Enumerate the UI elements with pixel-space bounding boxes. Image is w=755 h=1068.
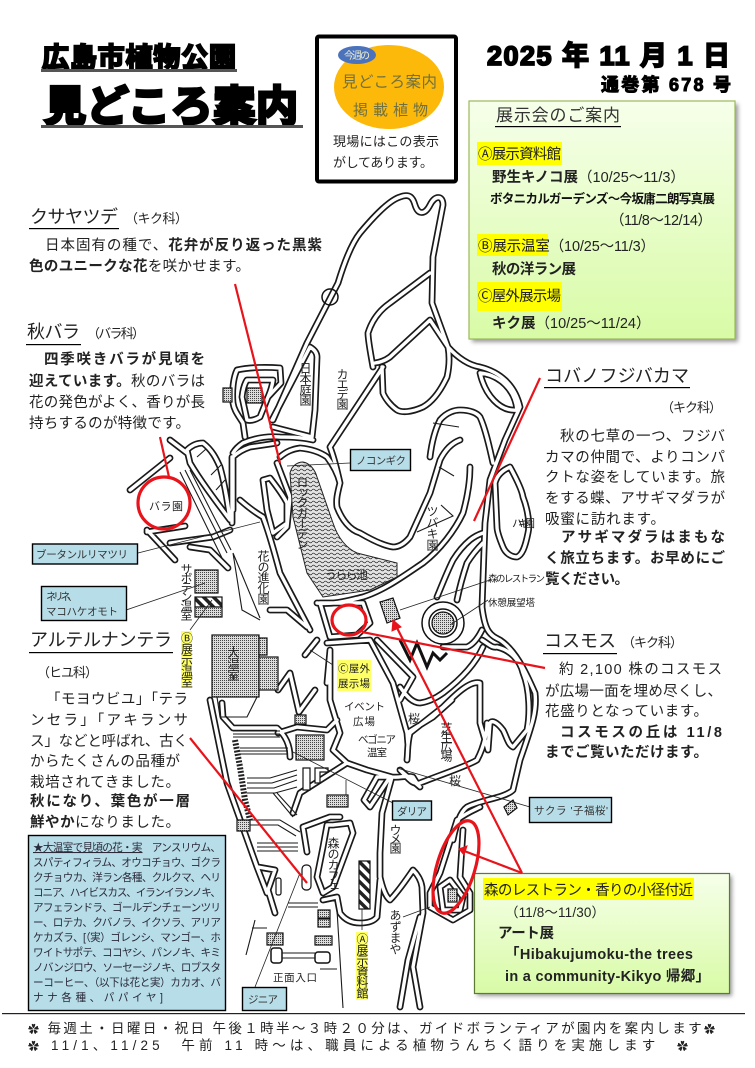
map place names: Ⓑ展示温室: [180, 632, 194, 688]
text block: 秋バラ: [26, 322, 205, 432]
map place names: 日本庭園: [298, 362, 312, 406]
map place names: ベゴニア: [358, 733, 396, 746]
text block: コスモス: コスモス: [544, 631, 616, 651]
text block: アルテルナンテラ: （ヒユ科）: [37, 665, 98, 680]
map buildings: [195, 289, 517, 963]
panel: exhibitions: ボタニカルガーデンズ～今坂庸二朗写真展: [490, 191, 715, 206]
text block: コスモス: [543, 631, 722, 761]
icon: orange sign: 掲載植物: [353, 102, 428, 119]
map place names: 花の進化園: [256, 550, 270, 605]
text block: アルテルナンテラ: アルテルナンテラ: [30, 630, 172, 650]
label: ダリア: ダリア: [397, 805, 427, 818]
text block: アルテルナンテラ: 秋になり、葉色が一層: [30, 792, 190, 810]
text block: コバノフジバカマ: コバノフジバカマ: [545, 366, 689, 386]
text block: クサヤツデ: [29, 207, 322, 275]
text block: クサヤツデ: （キク科）: [125, 211, 188, 226]
panel: greenhouse plant list: [28, 836, 226, 1010]
map place names: うらら池: [325, 568, 368, 582]
panel: greenhouse plant list: アフェランドラ、ゴールデンチェーンツリ: [33, 901, 221, 914]
label: ネリネ、マコハケオモト: [42, 586, 126, 620]
panel: greenhouse plant list: スパティフィラム、オウコチョウ、ゴクラ: [33, 856, 221, 869]
footer rule: [2, 1013, 745, 1014]
map place names: [149, 362, 545, 1000]
text block: コバノフジバカマ: 覧ください。: [545, 571, 629, 588]
observation tower: [422, 602, 464, 644]
map place names: ツバキ園: [425, 505, 439, 551]
text block: コスモス: （キク科）: [622, 635, 683, 650]
label: ジニア: ジニア: [248, 994, 278, 1006]
text block: コスモス: 約 2,100 株のコスモス: [559, 661, 722, 678]
panel: art exhibition: [474, 874, 732, 996]
panel: greenhouse plant list: クチョウカ、洋ラン各種、クルクマ、ヘリ: [33, 871, 221, 884]
text block: コバノフジバカマ: （キク科）: [661, 400, 722, 415]
footer notes: ✿ 11/1、11/25 午前 11 時～は、職員による植物うんちく語りを実施します ✿: [28, 1037, 688, 1053]
text block: 秋バラ: 四季咲きバラが見頃を: [44, 350, 205, 368]
map place names: 桜: [408, 712, 420, 726]
text block: コバノフジバカマ: アサギマダラはまもな: [561, 528, 725, 546]
text block: 秋バラ: 秋バラ: [27, 322, 80, 342]
title: garden name and heading: 見どころ案内: [44, 83, 298, 130]
panel: exhibitions: キク展（10/25～11/24）: [492, 315, 650, 332]
text block: コバノフジバカマ: く旅立ちます。お早めにご: [545, 549, 726, 567]
text block: 秋バラ: 花の発色がよく、香りが長: [29, 394, 205, 411]
text block: クサヤツデ: 色のユニークな花を咲かせます。: [29, 257, 250, 275]
text block: 秋バラ: 迎えています。秋のバラは: [29, 373, 205, 390]
date and issue number: [487, 41, 731, 95]
footer notes: [28, 1021, 715, 1053]
map place names: 芝生広場: [439, 722, 453, 763]
map place names: ウメ園: [388, 824, 402, 854]
text block: クサヤツデ: 日本固有の種で、花弁が反り返った黒紫: [45, 236, 322, 254]
panel: greenhouse plant list: ノバンジロウ、ソーセージノキ、ロブスタ: [33, 961, 221, 974]
text block: アルテルナンテラ: ンセラ」「アキランサ: [30, 712, 188, 729]
map fine lines: [180, 423, 459, 1008]
rock garden pond: [290, 462, 397, 597]
label: サクラ 子福桜: [530, 798, 612, 822]
map place names: 広場: [353, 715, 376, 728]
panel: exhibitions: （11/8～12/14）: [610, 212, 712, 229]
panel heading: 展示会のご案内: [496, 106, 620, 125]
icon: orange sign: 今週の: [344, 49, 370, 62]
text block: アルテルナンテラ: からたくさんの品種が: [30, 753, 180, 770]
text block: コバノフジバカマ: クトな姿をしています。旅: [545, 469, 726, 486]
title: garden name and heading: [41, 43, 303, 130]
label: ノコンギク: ノコンギク: [356, 455, 406, 467]
panel: art exhibition: 森のレストラン・香りの小径付近: [484, 882, 693, 899]
panel: exhibitions: Ⓐ展示資料館: [478, 146, 561, 163]
label: ダリア: [392, 801, 432, 820]
text block: アルテルナンテラ: 「モヨウビユ」「テラ: [46, 691, 188, 708]
panel: exhibitions: Ⓒ屋外展示場: [478, 288, 561, 305]
text block: アルテルナンテラ: 栽培されてきました。: [30, 774, 180, 791]
map place names: バラ園: [149, 500, 183, 513]
text block: クサヤツデ: クサヤツデ: [30, 207, 118, 227]
map place names: 大温室: [226, 646, 240, 681]
text block: アルテルナンテラ: ス」などと呼ばれ、古く: [30, 733, 188, 750]
panel: art exhibition: 「Hibakujumoku-the trees: [505, 946, 693, 963]
map place names: イベント: [344, 701, 385, 713]
text block: コバノフジバカマ: 秋の七草の一つ、フジバ: [560, 428, 725, 445]
map place names: Ⓒ屋外: [338, 663, 370, 675]
label: サクラ 子福桜: サクラ '子福桜': [534, 804, 608, 817]
text block: 秋バラ: 持ちするのが特徴です。: [29, 415, 190, 432]
text block: コスモス: が広場一面を埋め尽くし、: [545, 683, 722, 700]
map place names: 休憩展望塔: [488, 597, 535, 609]
panel: exhibitions: [469, 101, 738, 342]
panel: greenhouse plant list: ワイトサポテ、ココヤシ、パンノキ、キミ: [33, 947, 221, 959]
map place names: 桜: [449, 774, 461, 788]
panel: art exhibition: in a community-Kikyo 帰郷」: [505, 968, 710, 985]
label leader lines: [126, 463, 530, 987]
sign legend box: がしてあります。: [333, 155, 433, 170]
text block: コバノフジバカマ: 吸蜜に訪れます。: [545, 511, 665, 528]
panel: greenhouse plant list: ★大温室で見頃の花・実 アンスリウム、: [33, 841, 221, 854]
text block: コバノフジバカマ: カマの仲間で、よりコンパ: [545, 449, 725, 466]
sign legend box: 現場にはこの表示: [333, 134, 439, 149]
footer notes: ✿ 毎週土・日曜日・祝日 午後１時半～３時２０分は、ガイドボランティアが園内を案内します✿: [28, 1021, 715, 1036]
park map: [126, 196, 545, 1008]
map place names: 森のカフェ: [326, 836, 340, 892]
red callout lines and highlight circles: [138, 284, 545, 918]
label: ブータンルリマツリ: [32, 544, 138, 564]
icon: orange sign: [334, 45, 444, 129]
panel: greenhouse plant list: ナナ各種、パパイヤ]: [33, 991, 163, 1004]
label: ジニア: [242, 988, 286, 1010]
label: ネリネ、マコハケオモト: ネリネ、: [46, 591, 78, 603]
panel: exhibitions: 秋の洋ラン展: [492, 260, 576, 278]
map place names: 温室: [367, 747, 387, 759]
text block: コスモス: 花盛りとなっています。: [545, 703, 708, 720]
panel: art exhibition: アート展: [498, 925, 554, 942]
map place names: カエデ園: [335, 368, 349, 410]
text block: 秋バラ: （バラ科）: [87, 326, 145, 341]
label: ブータンルリマツリ: ブータンルリマツリ: [36, 548, 128, 561]
title: garden name and heading: 広島市植物公園: [42, 43, 236, 73]
map place names: 森のレストラン: [488, 573, 545, 585]
arrowheads: [392, 620, 467, 855]
map place names: Ⓐ展示資料館: [355, 933, 369, 999]
panel: greenhouse plant list: コニア、ハイビスカス、イランイランノキ、: [33, 887, 221, 899]
panel: greenhouse plant list: ーコーヒー、（以下は花と実）カカオ、バ: [33, 976, 221, 989]
text block: コスモス: までご覧いただけます。: [545, 743, 708, 761]
text block: アルテルナンテラ: 鮮やかになりました。: [30, 814, 180, 831]
map place names: 展示場: [338, 677, 370, 690]
label: ノコンギク: [350, 450, 410, 470]
panel: greenhouse plant list: ケカズラ、[（実）ゴレンシ、マンゴー、ホ: [33, 931, 221, 944]
text block: コバノフジバカマ: [544, 366, 726, 588]
sign legend box: [317, 36, 456, 182]
panel: art exhibition: （11/8～11/30）: [505, 905, 605, 920]
panel: greenhouse plant list: ー、ロテカ、クバノラ、イクソラ、アリア: [33, 917, 221, 929]
map place names: 正面入口: [273, 972, 317, 984]
date and issue number: 通巻第 678 号: [601, 74, 731, 95]
text block: コスモス: コスモスの丘は 11/8: [560, 724, 722, 741]
panel: exhibitions: 野生キノコ展（10/25～11/3）: [492, 169, 685, 186]
map place names: サボテン温室: [179, 563, 193, 621]
map place names: ハギ園: [512, 517, 535, 530]
text block: アルテルナンテラ: [29, 630, 190, 831]
map place names: ロックガーデン: [295, 476, 309, 550]
icon: orange sign: 見どころ案内: [342, 73, 437, 91]
map place names: あずまや: [388, 909, 402, 955]
text block: コバノフジバカマ: をする蝶、アサギマダラが: [545, 490, 726, 507]
panel: exhibitions: Ⓑ展示温室（10/25～11/3）: [478, 238, 655, 255]
date and issue number: 2025 年 11 月 1 日: [487, 41, 730, 71]
label: ネリネ、マコハケオモト: マコハケオモト: [46, 606, 118, 618]
